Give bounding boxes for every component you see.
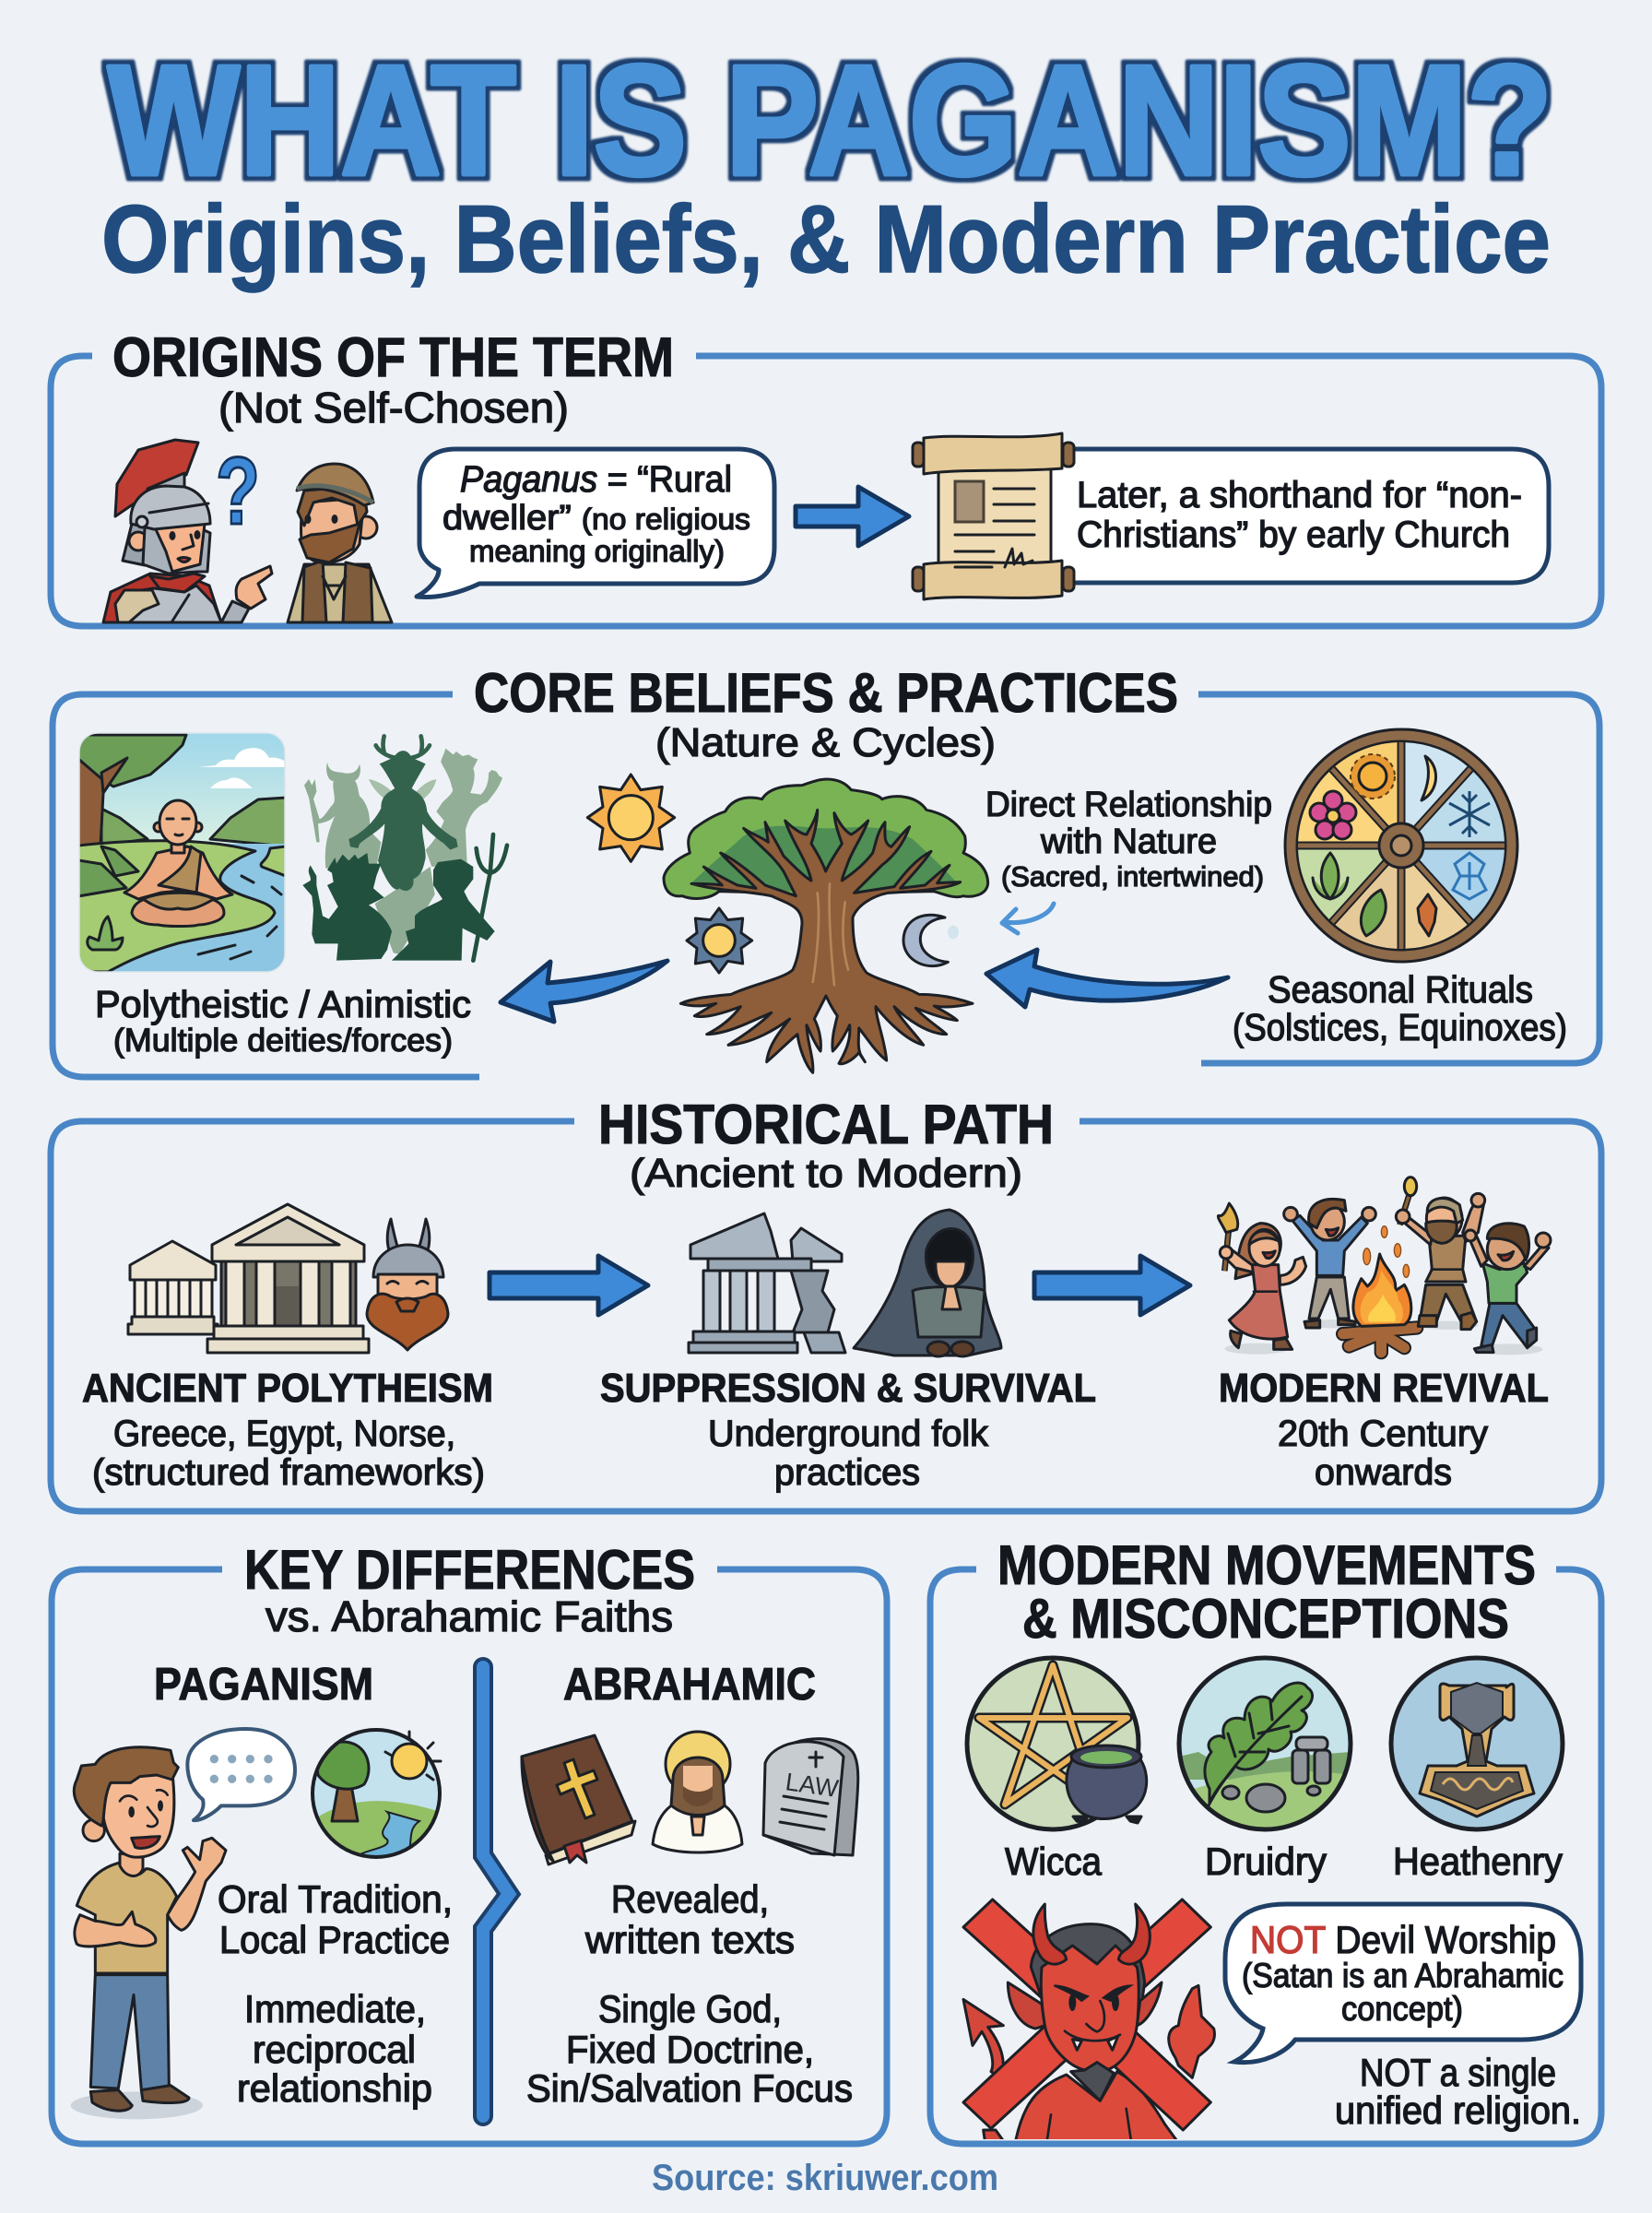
icon: small sun xyxy=(687,908,752,973)
bubble text line two: (Satan is an Abrahamic xyxy=(1242,1957,1564,1994)
icon: norse warrior xyxy=(367,1219,448,1350)
scene border xyxy=(79,733,285,972)
figure: man in blue xyxy=(1284,1199,1375,1328)
subheading: (Nature & Cycles) xyxy=(655,720,996,765)
text: modern revival: 20th Century xyxy=(1278,1414,1488,1454)
speech bubble: paganus xyxy=(417,449,774,598)
text: suppression and survival: SUPPRESSION & SURVIVAL xyxy=(600,1366,1096,1411)
trunk bark highlights xyxy=(813,883,848,985)
text: heathenry: Heathenry xyxy=(1393,1840,1563,1883)
text: not a single religion: unified religion. xyxy=(1335,2089,1581,2132)
subheading: vs. Abrahamic Faiths xyxy=(266,1592,673,1640)
ground shadows xyxy=(1224,1320,1542,1355)
text: direct relationship: Direct Relationship xyxy=(985,786,1272,824)
text: oral tradition xyxy=(218,1877,453,1961)
text: seasonal rituals xyxy=(1233,968,1567,1048)
season icon: sun xyxy=(1351,754,1395,799)
season icon: snowflake xyxy=(1449,791,1490,837)
icon: small temple xyxy=(128,1241,218,1334)
meditation scene xyxy=(78,733,286,973)
figure: woman with torch xyxy=(1218,1203,1306,1349)
text: modern revival xyxy=(1219,1366,1549,1493)
heading: & MISCONCEPTIONS xyxy=(1022,1588,1509,1650)
text: direct relationship: (Sacred, intertwined) xyxy=(1001,860,1264,893)
heading xyxy=(997,1534,1536,1650)
icon: storyteller with speech bubble xyxy=(71,1729,295,2119)
season icon: leaf xyxy=(1361,890,1386,936)
text: immediate relationship: relationship xyxy=(237,2066,432,2110)
panel frame xyxy=(53,694,479,1077)
icon: law tablet: LAW xyxy=(784,1768,841,1803)
text: seasonal rituals: Seasonal Rituals xyxy=(1268,968,1533,1011)
text: revealed texts: written texts xyxy=(584,1918,795,1961)
divider fill xyxy=(483,1667,509,2116)
bonfire logs xyxy=(1343,1328,1417,1353)
text: druidry: Druidry xyxy=(1205,1840,1327,1883)
heading: CORE BELIEFS & PRACTICES xyxy=(474,662,1178,724)
text: oral tradition: Oral Tradition, xyxy=(218,1877,453,1921)
monk xyxy=(124,800,232,926)
season icon: snow crystal xyxy=(1453,853,1486,899)
icon: large temple xyxy=(207,1204,369,1353)
panel: key differences xyxy=(52,1539,887,2144)
text: immediate relationship xyxy=(237,1987,432,2110)
bubble text line two: dweller” (no religious xyxy=(442,499,750,538)
speech bubble: dots xyxy=(187,1729,295,1820)
bonfire flames xyxy=(1353,1226,1411,1326)
icon: prophet figure xyxy=(653,1732,742,1852)
icon: law tablet xyxy=(763,1739,858,1855)
devil head xyxy=(1008,1904,1162,2101)
figure: bearded man with torch xyxy=(1396,1178,1485,1330)
panel frame xyxy=(930,1569,1601,2144)
speech bubble: later shorthand xyxy=(1014,449,1549,583)
icon: holy book xyxy=(522,1735,635,1864)
arrow xyxy=(796,487,909,546)
text: ancient polytheism: ANCIENT POLYTHEISM xyxy=(82,1366,493,1411)
heading: HISTORICAL PATH xyxy=(598,1094,1054,1155)
text: ancient polytheism: (structured frameworks) xyxy=(92,1452,485,1493)
panel frame right xyxy=(1198,694,1599,1063)
column heading: paganism: PAGANISM xyxy=(154,1660,373,1710)
bubble text: Paganus = “Rural xyxy=(460,459,732,500)
panel frame xyxy=(51,356,1601,626)
icon: sun xyxy=(587,775,675,861)
speech bubble: not devil worship xyxy=(1225,1904,1581,2063)
tree with sun and moon xyxy=(587,775,988,1072)
text: oral tradition: Local Practice xyxy=(219,1918,450,1961)
arrow xyxy=(1034,1256,1190,1315)
icon: ruined temple xyxy=(689,1213,845,1353)
heading: MODERN MOVEMENTS xyxy=(997,1534,1536,1596)
icon: deity silhouettes xyxy=(302,736,507,961)
text: revealed texts: Revealed, xyxy=(611,1877,769,1921)
text: polytheistic animistic: Polytheistic / Animistic xyxy=(95,983,471,1025)
tree canopy xyxy=(664,779,988,898)
text: polytheistic animistic: (Multiple deities/forces) xyxy=(113,1023,453,1059)
panel: origins of the term xyxy=(51,326,1601,626)
text: polytheistic animistic xyxy=(95,983,471,1059)
text: wicca: Wicca xyxy=(1005,1840,1103,1883)
subheading: (Ancient to Modern) xyxy=(630,1151,1022,1196)
heading: ORIGINS OF THE TERM xyxy=(112,326,674,388)
devil body xyxy=(1016,2072,1177,2141)
panel frame xyxy=(52,1569,887,2144)
text: direct relationship: with Nature xyxy=(1040,822,1217,861)
text: modern revival: onwards xyxy=(1315,1452,1452,1493)
panel: modern movements and misconceptions xyxy=(930,1534,1601,2144)
season icon: moon xyxy=(1422,756,1436,800)
subtitle: Origins, Beliefs, & Modern Practice xyxy=(101,186,1551,293)
text: single god: Single God, xyxy=(598,1987,782,2030)
bubble text: Later, a shorthand for “non- xyxy=(1077,475,1522,515)
divider xyxy=(483,1667,509,2116)
text: ancient polytheism: Greece, Egypt, Norse, xyxy=(113,1414,455,1454)
icon: roman soldier xyxy=(103,440,272,622)
icon: druidry oak and dolmen xyxy=(1179,1658,1351,1829)
icon: question mark: ? xyxy=(216,438,260,545)
icon: nature circle xyxy=(312,1729,441,1858)
panel frame xyxy=(51,1121,1601,1511)
season icon: autumn leaf xyxy=(1418,894,1436,936)
icon: wheel of the year xyxy=(1285,729,1517,962)
panel: core beliefs and practices xyxy=(53,662,1599,1077)
text: immediate relationship: reciprocal xyxy=(253,2028,416,2071)
text: seasonal rituals: (Solstices, Equinoxes) xyxy=(1233,1006,1567,1048)
bubble text line three: concept) xyxy=(1341,1990,1463,2028)
text: direct relationship xyxy=(985,786,1272,893)
bubble text line two: Christians” by early Church xyxy=(1077,515,1510,555)
text: suppression and survival xyxy=(600,1366,1096,1493)
text: suppression and survival: practices xyxy=(774,1452,920,1493)
text: suppression and survival: Underground folk xyxy=(708,1414,989,1454)
arrow: small relationship xyxy=(1002,904,1054,933)
subheading: (Not Self-Chosen) xyxy=(218,384,569,432)
text: single god xyxy=(526,1987,853,2110)
source credit: Source: skriuwer.com xyxy=(652,2158,998,2198)
arrow: from seasonal rituals xyxy=(986,950,1228,1007)
text: revealed texts xyxy=(584,1877,795,1961)
bubble text line three: meaning originally) xyxy=(469,534,725,568)
arrow xyxy=(490,1256,648,1315)
icon: crescent moon xyxy=(903,915,959,966)
devil tail xyxy=(963,1999,1003,2141)
text: single god: Fixed Doctrine, xyxy=(566,2028,814,2071)
icon: hooded figure xyxy=(854,1210,1001,1356)
red x mark xyxy=(963,1899,1210,2130)
icon: peasant xyxy=(288,464,392,622)
icon: devil with red x xyxy=(963,1899,1215,2141)
tree trunk, branches and roots xyxy=(680,810,973,1072)
season icon: flower xyxy=(1310,791,1356,839)
text: not a single religion xyxy=(1335,2051,1581,2132)
bubble text: NOT Devil Worship xyxy=(1250,1918,1556,1961)
panel: historical path xyxy=(51,1094,1601,1511)
arrow: to polytheistic xyxy=(501,961,667,1022)
text: not a single religion: NOT a single xyxy=(1360,2051,1556,2094)
icon: cauldron xyxy=(1067,1746,1147,1823)
illustration: modern revival bonfire xyxy=(1218,1178,1551,1355)
icon: scroll xyxy=(913,433,1074,599)
text: ancient polytheism xyxy=(82,1366,493,1493)
icon: wicca pentagram xyxy=(967,1658,1147,1829)
icon: heathenry thor hammer xyxy=(1391,1658,1563,1829)
heading: KEY DIFFERENCES xyxy=(244,1539,695,1601)
devil pointing hand xyxy=(1169,1985,1215,2077)
text: immediate relationship: Immediate, xyxy=(244,1987,426,2030)
column heading: abrahamic: ABRAHAMIC xyxy=(563,1660,816,1710)
season icon: sprout xyxy=(1313,853,1348,899)
text: single god: Sin/Salvation Focus xyxy=(526,2066,853,2110)
figure: man in green xyxy=(1465,1224,1551,1353)
text: modern revival: MODERN REVIVAL xyxy=(1219,1366,1549,1411)
